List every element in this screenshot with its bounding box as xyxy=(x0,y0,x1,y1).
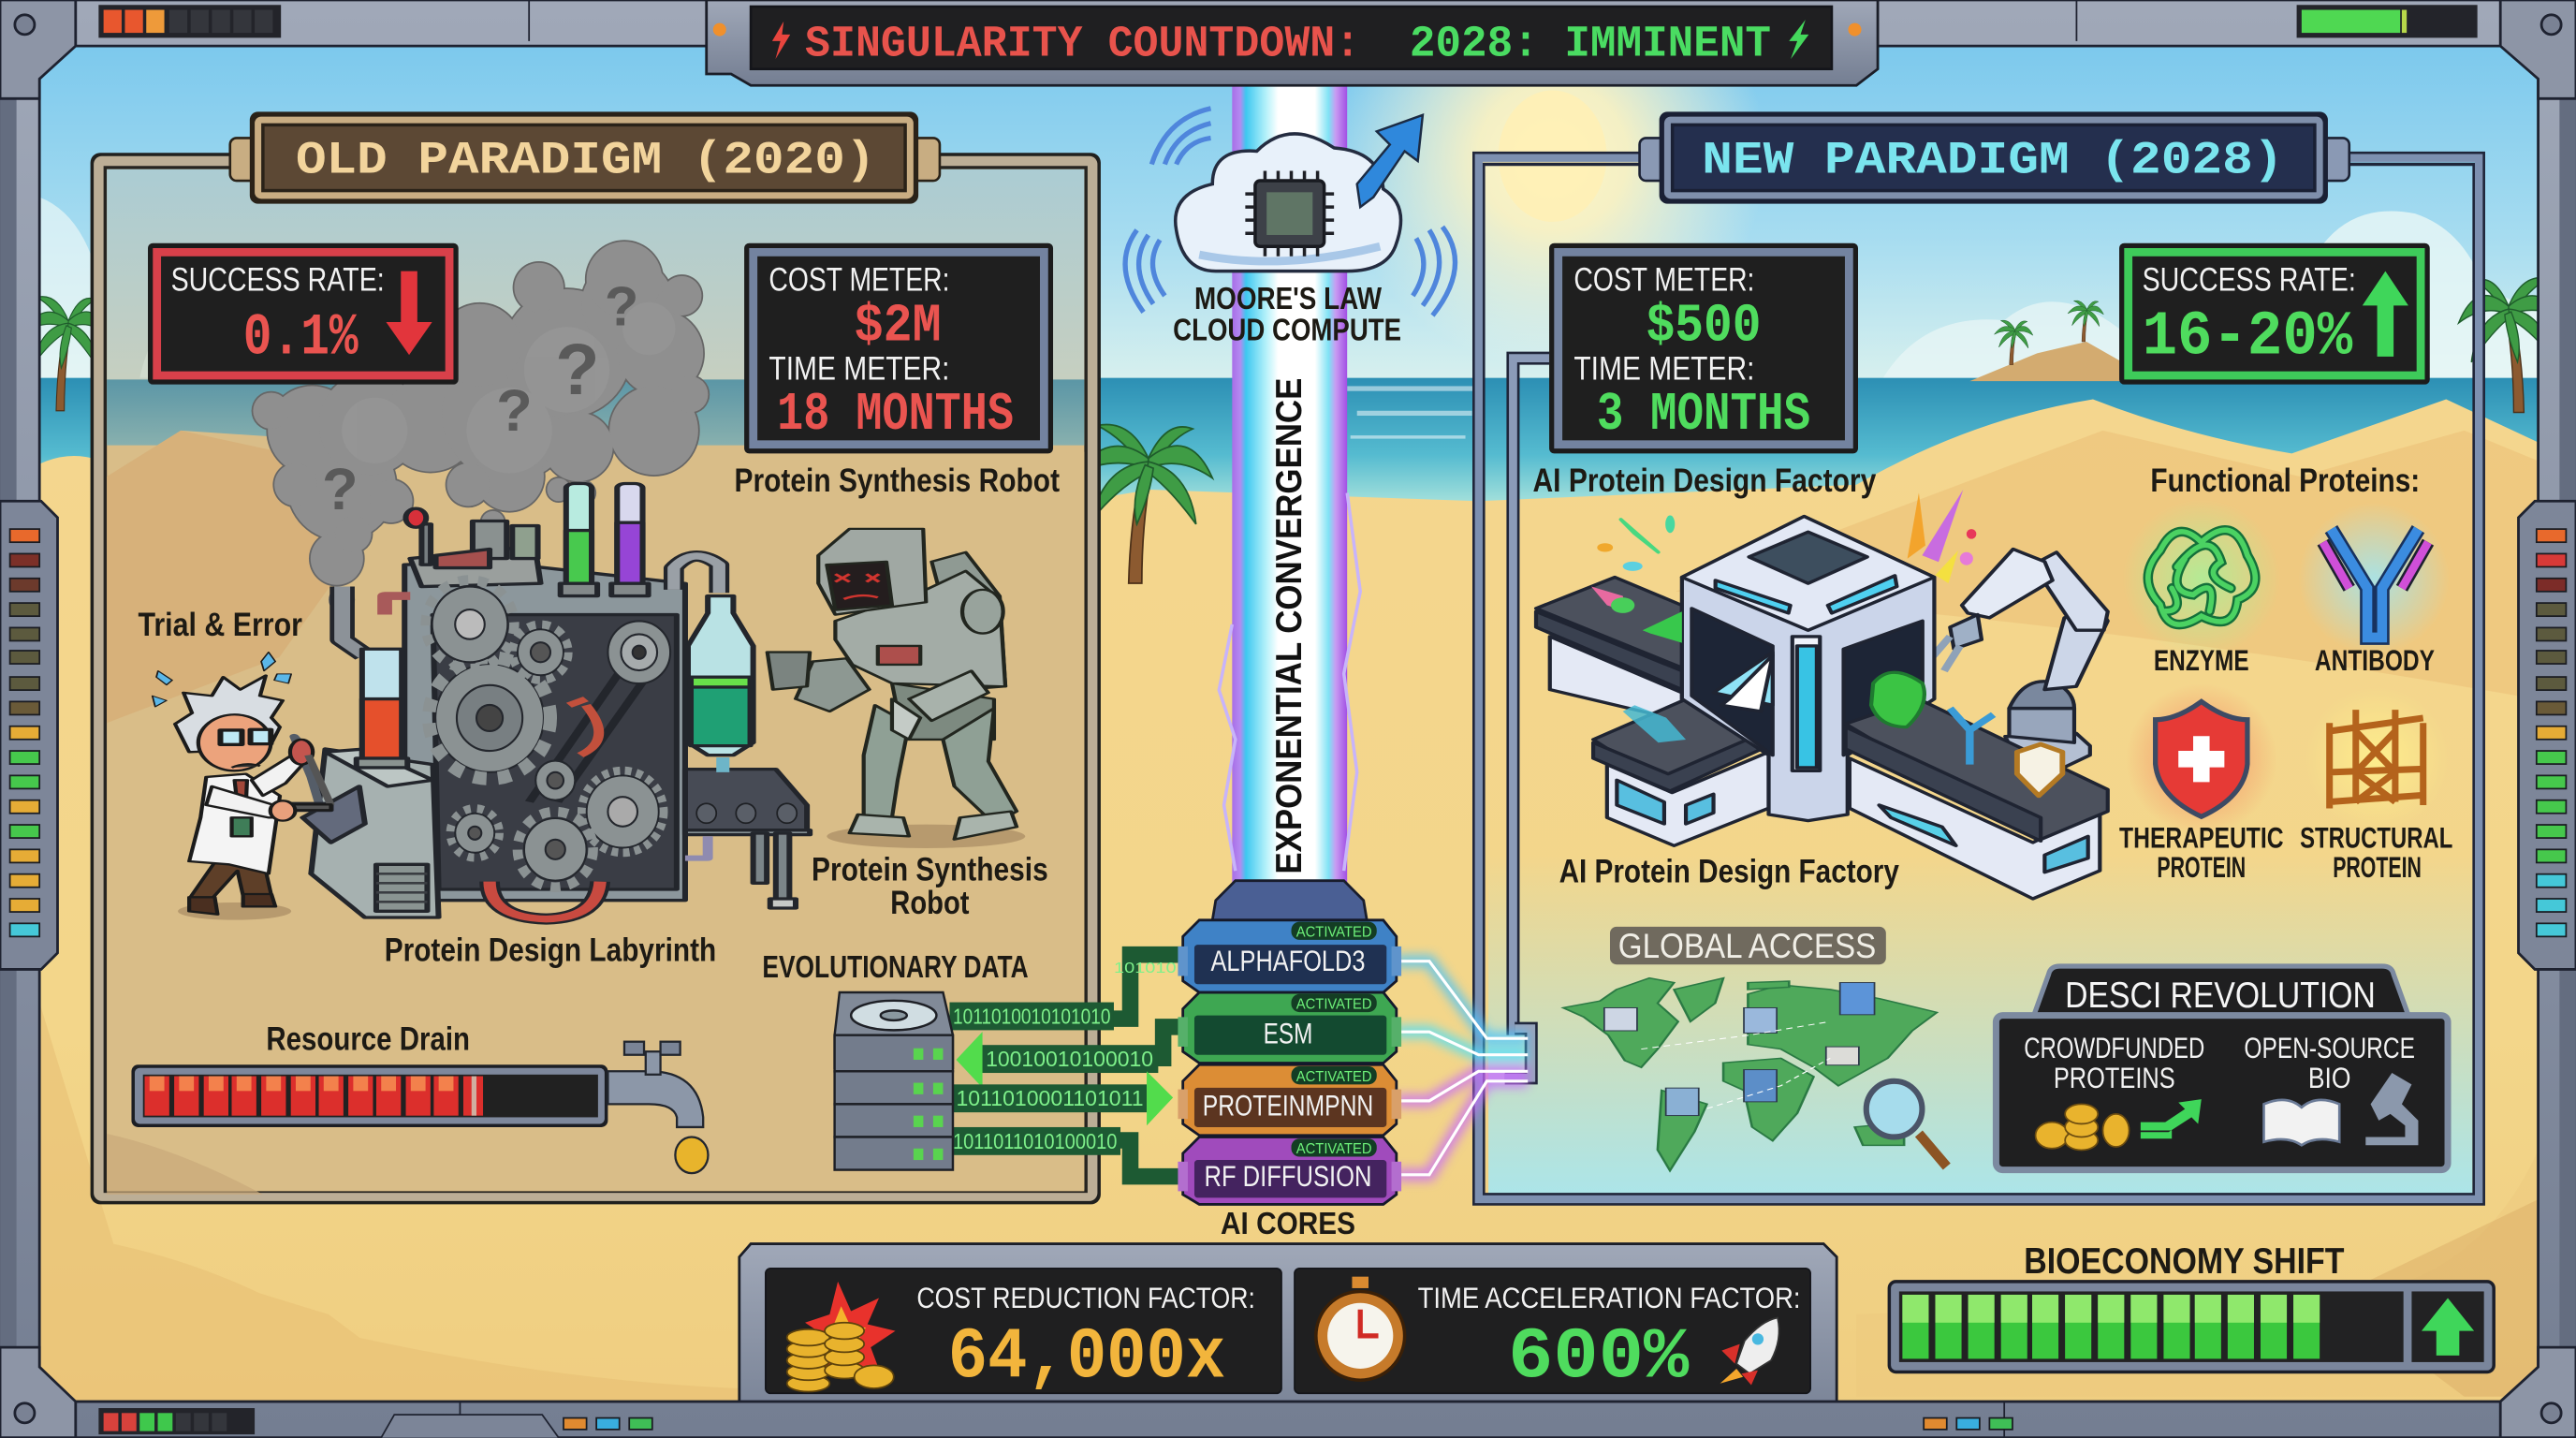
core: proteinmpnn: ACTIVATED xyxy=(1296,1069,1372,1085)
icon: open book xyxy=(2263,1100,2339,1145)
top left led strip xyxy=(98,5,281,37)
label: structural protein xyxy=(2300,821,2452,884)
protein: structural xyxy=(2305,687,2450,831)
core: rf diffusion: ACTIVATED xyxy=(1296,1141,1372,1157)
icon: magnifier xyxy=(1866,1081,1947,1167)
icon: growth arrow xyxy=(2141,1099,2202,1138)
palm trees xyxy=(22,277,2567,583)
illustration: smoke clouds: ? xyxy=(322,457,359,522)
meter: new cost and time: 3 MONTHS xyxy=(1597,385,1810,446)
label: moore's law cloud compute: CLOUD COMPUTE xyxy=(1173,313,1401,347)
core: proteinmpnn xyxy=(1178,1064,1401,1136)
bottom indicator lights right xyxy=(1924,1418,2012,1430)
tower xyxy=(1682,517,1934,821)
meter: new cost and time xyxy=(1549,243,1858,453)
front conveyor xyxy=(1607,752,1769,845)
core: esm xyxy=(1178,992,1401,1064)
illustration: protein design machine xyxy=(291,484,810,919)
top header: singularity countdown xyxy=(707,0,1878,85)
meter: old success rate: 0.1% xyxy=(243,303,359,371)
icon: microscope xyxy=(2365,1073,2418,1145)
icon: up arrow xyxy=(2422,1298,2474,1356)
label: evolutionary data: EVOLUTIONARY DATA xyxy=(762,950,1029,985)
meter: new cost and time: $500 xyxy=(1647,296,1761,357)
illustration: robot xyxy=(768,529,1025,848)
data stream connectors: 1011010010101010 xyxy=(953,1004,1110,1028)
label: therapeutic protein: THERAPEUTIC xyxy=(2119,821,2284,855)
panel: desci revolution: BIO xyxy=(2308,1061,2351,1094)
meter: old success rate xyxy=(148,243,459,385)
core: rf diffusion xyxy=(1178,1137,1401,1204)
panel: old paradigm xyxy=(91,153,1101,1204)
label: antibody: ANTIBODY xyxy=(2315,643,2435,677)
label: therapeutic protein xyxy=(2119,821,2284,884)
meter: old cost and time: COST METER: xyxy=(768,262,949,299)
label: protein design labyrinth: Protein Design Labyrinth xyxy=(385,932,716,969)
core: proteinmpnn: PROTEINMPNN xyxy=(1203,1089,1373,1123)
data stream connectors: 101010 xyxy=(1114,961,1177,976)
icon: signal waves xyxy=(1125,109,1456,315)
panel: desci revolution: CROWDFUNDED xyxy=(2024,1031,2204,1064)
bioeconomy shift bar xyxy=(1889,1282,2494,1372)
meter: old cost and time: 18 MONTHS xyxy=(777,385,1014,446)
panel: cost reduction xyxy=(766,1269,1281,1400)
label: ai protein design factory top: AI Protein Design Factory xyxy=(1532,462,1877,499)
overall progress bar xyxy=(800,1408,1778,1431)
meter: old cost and time: TIME METER: xyxy=(768,350,949,387)
right led column xyxy=(2519,501,2576,969)
heading: old paradigm xyxy=(230,111,940,204)
data stream connectors xyxy=(949,955,1183,1177)
meter: old cost and time: $2M xyxy=(855,296,942,357)
robot arm base xyxy=(1928,550,2108,770)
illustration: scientist xyxy=(153,653,331,920)
bottom indicator lights left xyxy=(564,1418,652,1430)
world map xyxy=(1563,978,1947,1170)
panel: desci revolution xyxy=(1996,966,2448,1170)
label: functional proteins: Functional Proteins: xyxy=(2150,462,2420,499)
label: enzyme: ENZYME xyxy=(2154,643,2249,677)
products on the belts xyxy=(1871,672,1925,727)
heading: new paradigm xyxy=(1640,111,2349,204)
top right status bar xyxy=(2297,5,2478,37)
icon: rocket xyxy=(1720,1318,1779,1385)
sparks above factory xyxy=(1908,490,1976,583)
label: resource drain: Resource Drain xyxy=(266,1020,470,1057)
panel: cost reduction: COST REDUCTION FACTOR: xyxy=(916,1281,1255,1314)
meter: new success rate: SUCCESS RATE: xyxy=(2143,262,2356,299)
core: rf diffusion: RF DIFFUSION xyxy=(1204,1159,1372,1193)
core: esm: ESM xyxy=(1264,1016,1312,1049)
bottom left led strip xyxy=(98,1408,255,1434)
protein: enzyme xyxy=(2123,500,2280,657)
panel: time acceleration: 600% xyxy=(1508,1318,1690,1400)
heading: old paradigm: OLD PARADIGM (2020) xyxy=(296,134,875,186)
panel: desci revolution: OPEN-SOURCE xyxy=(2244,1031,2415,1064)
icon: red spark xyxy=(772,22,790,59)
icon: exploding coins xyxy=(787,1282,896,1392)
vertical label: exponential convergence: EXPONENTIAL CONVERGENCE xyxy=(1269,378,1310,874)
AI cores stack xyxy=(1178,881,1401,1204)
illustration: smoke clouds xyxy=(252,240,710,613)
left led column xyxy=(0,501,57,969)
label: structural protein: STRUCTURAL xyxy=(2300,821,2452,855)
icon: blue growth arrow xyxy=(1357,115,1423,207)
connector pipe to new cost meter xyxy=(1505,359,1549,1078)
icon: server stack xyxy=(835,992,953,1170)
illustration: smoke clouds: ? xyxy=(555,330,599,410)
data stream connectors: 10010010100010 xyxy=(986,1047,1153,1071)
core: alphafold3: ALPHAFOLD3 xyxy=(1211,944,1365,977)
protein: antibody xyxy=(2298,503,2450,654)
label: protein synthesis robot top: Protein Synthesis Robot xyxy=(735,462,1060,499)
label: therapeutic protein: PROTEIN xyxy=(2157,850,2246,884)
gears xyxy=(426,580,670,888)
meter: new cost and time: TIME METER: xyxy=(1573,350,1754,387)
meter: new cost and time: COST METER: xyxy=(1573,262,1754,299)
label: protein synthesis robot: Robot xyxy=(890,885,970,921)
back conveyor xyxy=(1550,637,1682,721)
bottom status console xyxy=(739,1244,1837,1438)
glowing links from AI cores to new panel xyxy=(1397,961,1528,1175)
icon: green up arrow xyxy=(2363,271,2408,357)
beam pedestal xyxy=(1212,881,1367,920)
data stream connectors: 1011010001101011 xyxy=(956,1086,1144,1110)
meter: new success rate: 16-20% xyxy=(2143,301,2353,373)
label: moore's law cloud compute xyxy=(1173,282,1401,347)
label: bioeconomy shift: BIOECONOMY SHIFT xyxy=(2024,1241,2345,1282)
right conveyor xyxy=(1850,758,2100,899)
top header: singularity countdown: SINGULARITY COUNTDOWN: xyxy=(805,21,1360,70)
panel: new paradigm xyxy=(1473,153,2484,1204)
label: ai cores: AI CORES xyxy=(1221,1207,1355,1241)
meter: new success rate xyxy=(2119,243,2430,385)
label: trial and error: Trial & Error xyxy=(138,607,302,643)
icon: faucet and coin xyxy=(607,1042,708,1173)
data stream connectors: 1011011010100010 xyxy=(953,1129,1117,1153)
label: protein synthesis robot xyxy=(812,852,1048,921)
meter: old success rate: SUCCESS RATE: xyxy=(171,262,385,299)
illustration: ai protein design factory xyxy=(1536,490,2108,899)
label: structural protein: PROTEIN xyxy=(2333,850,2422,884)
label: ai protein design factory bottom: AI Protein Design Factory xyxy=(1559,853,1899,889)
panel: desci revolution: PROTEINS xyxy=(2054,1061,2175,1094)
core: alphafold3 xyxy=(1178,920,1401,992)
core: esm: ACTIVATED xyxy=(1296,997,1372,1013)
icon: cloud compute xyxy=(1125,109,1456,315)
meter: old cost and time xyxy=(744,243,1053,453)
icon: red down arrow xyxy=(386,271,432,355)
icon: stopwatch xyxy=(1316,1277,1405,1380)
illustration: smoke clouds: ? xyxy=(496,378,533,444)
core: alphafold3: ACTIVATED xyxy=(1296,924,1372,940)
heading: new paradigm: NEW PARADIGM (2028) xyxy=(1702,134,2284,186)
resource drain bar xyxy=(131,1042,708,1173)
badge: global access: GLOBAL ACCESS xyxy=(1618,927,1876,965)
top header: singularity countdown: 2028: IMMINENT xyxy=(1410,21,1771,70)
panel: time acceleration: TIME ACCELERATION FACTOR: xyxy=(1418,1281,1801,1314)
icon: green lightning xyxy=(1789,20,1808,59)
panel: cost reduction: 64,000x xyxy=(948,1318,1225,1400)
icon: coins xyxy=(2036,1104,2130,1151)
panel: desci revolution: DESCI REVOLUTION xyxy=(2065,976,2376,1016)
conveyor rollers xyxy=(696,803,797,823)
protein: therapeutic xyxy=(2126,683,2277,835)
label: protein synthesis robot: Protein Synthesis xyxy=(812,852,1048,888)
panel: time acceleration xyxy=(1295,1269,1810,1400)
label: moore's law cloud compute: MOORE'S LAW xyxy=(1194,282,1382,316)
energy beam xyxy=(1219,82,1360,903)
illustration: smoke clouds: ? xyxy=(605,274,638,337)
